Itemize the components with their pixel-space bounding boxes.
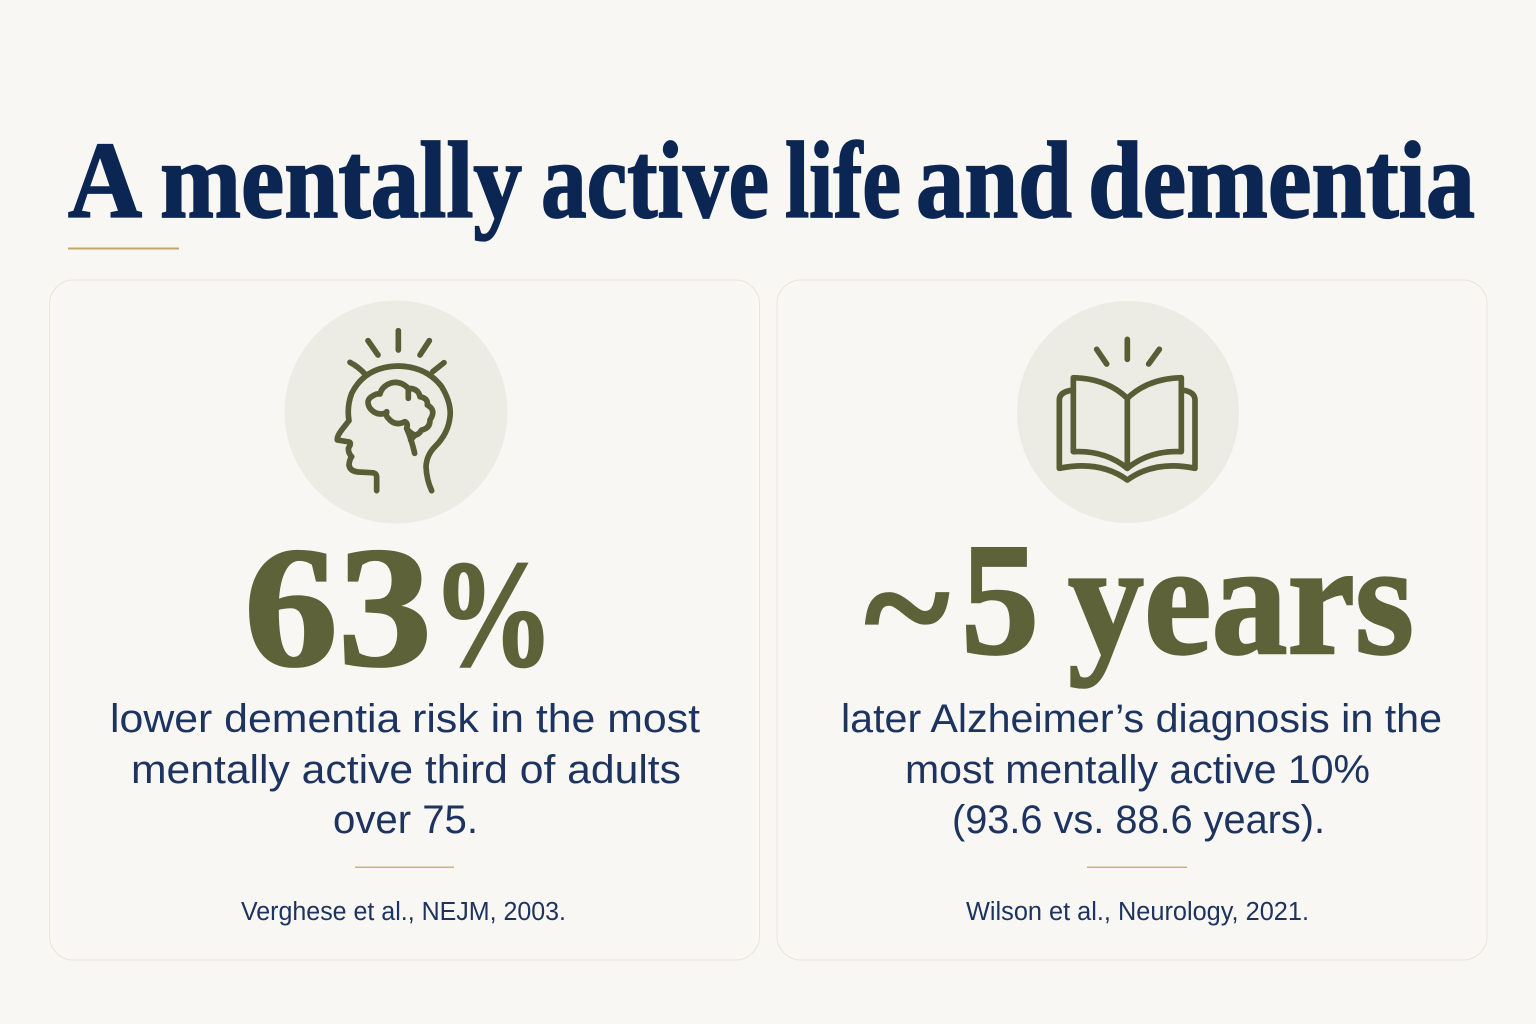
title: A — [68, 120, 142, 241]
divider — [355, 866, 454, 868]
description: mentally active third of adults — [131, 748, 681, 792]
title: life — [785, 120, 901, 241]
description: over 75. — [333, 798, 478, 842]
divider — [1087, 866, 1187, 868]
statistic: 63%: 63 — [244, 513, 432, 703]
title: dementia — [1088, 120, 1475, 241]
description: lower dementia risk in the most — [110, 697, 700, 741]
icon: head with brain — [284, 300, 508, 524]
panel: mental activity and dementia risk — [50, 280, 760, 960]
statistic: ~5 years: ~ — [865, 518, 949, 696]
description: later Alzheimer’s diagnosis in the — [841, 697, 1442, 741]
statistic: ~5 years: years — [1068, 510, 1414, 688]
title: mentally — [160, 120, 522, 241]
title: active — [541, 120, 769, 241]
card background — [777, 280, 1487, 960]
statistic: 63%: % — [432, 530, 554, 698]
title: and — [916, 120, 1072, 241]
source citation: Wilson et al., Neurology, 2021. — [966, 898, 1309, 926]
title underline — [68, 248, 179, 250]
panel: delayed Alzheimer's diagnosis — [777, 280, 1487, 960]
statistic: ~5 years: 5 — [961, 510, 1039, 688]
icon: open book — [1017, 301, 1239, 523]
source citation: Verghese et al., NEJM, 2003. — [241, 898, 566, 926]
card background — [50, 280, 760, 960]
description: (93.6 vs. 88.6 years). — [952, 798, 1325, 842]
description: most mentally active 10% — [905, 748, 1370, 792]
